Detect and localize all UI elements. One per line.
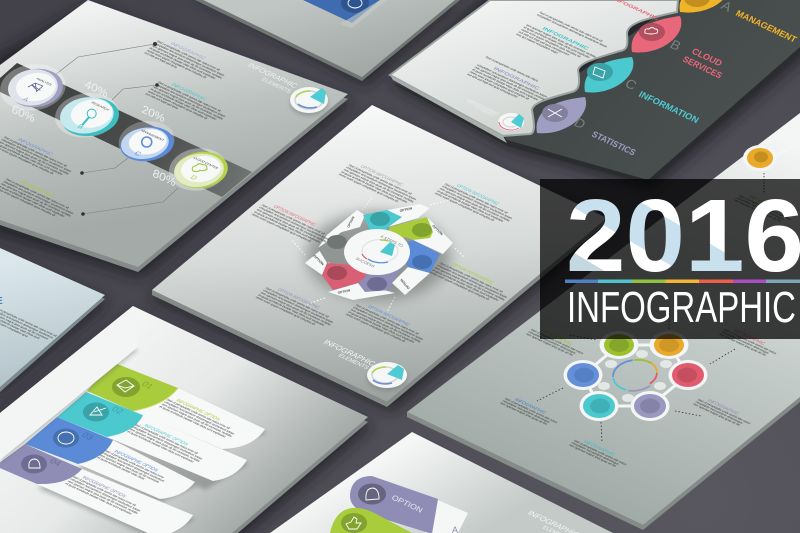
ribbon 2 text: INFOGRAPHIC OPTION	[143, 423, 190, 447]
text block red: rem aperiam eaque ipsa quae ab illo	[718, 332, 767, 357]
node red	[668, 360, 708, 390]
text block teal: nemo enim ipsam voluptatem quia voluptas sit	[434, 192, 495, 222]
sheet title: ELEMENTS	[337, 353, 370, 371]
ribbon 1 text: INFOGRAPHIC OPTION	[175, 398, 222, 422]
text block green	[429, 258, 515, 306]
text block red: OPTION INFOGRAPHIC	[272, 204, 318, 228]
text block red	[251, 200, 337, 248]
text block purple	[255, 283, 341, 331]
text block teal: INFOGRAPHIC	[170, 82, 209, 103]
hub	[344, 229, 410, 275]
text block red: INFOGRAPHIC	[732, 328, 767, 347]
cover flap shadow	[0, 345, 138, 463]
grey step letters: D	[571, 115, 588, 132]
rainbow rule	[565, 280, 800, 283]
ribbon 1 text: voluptatem accusantium doloremque laudantium totam	[163, 400, 236, 436]
text block red: et quasi architecto beatae vitae dicta sunt explicabo	[253, 210, 322, 244]
sheet title: INFOGRAPHIC	[246, 61, 300, 90]
dotted connectors	[292, 198, 465, 312]
text block green: voluptatem accusantium doloremque laudantium totam	[436, 264, 509, 299]
text block teal: eos qui ratione voluptatem sequi	[515, 33, 560, 55]
ribbon 3 blue: 03	[80, 431, 96, 442]
text block teal	[434, 179, 520, 227]
blue segment	[379, 240, 440, 273]
red segment	[322, 253, 379, 290]
sheet: circular process	[407, 113, 800, 530]
ribbon 3 text	[96, 446, 172, 487]
text block purple: Sed ut perspiciatis unde omnis iste natus	[697, 398, 752, 425]
circle labels	[35, 77, 220, 170]
centre ring	[612, 358, 658, 393]
text block green: INFOGRAPHIC	[18, 179, 57, 200]
text block purple: et quasi architecto beatae vitae dicta sunt explicabo	[148, 47, 217, 80]
pill: purple option	[350, 476, 438, 533]
text block blue: Sed ut perspiciatis unde omnis iste natus error sit	[354, 303, 420, 335]
text block green: voluptatem accusantium doloremque laudantium totam	[2, 180, 75, 215]
ribbon 2 text: et quasi architecto beatae vitae dicta sunt explicabo	[126, 430, 195, 463]
text block purple	[466, 55, 557, 108]
ribbon 2 text: rem aperiam eaque ipsa quae ab illo inventore veritatis	[129, 428, 202, 463]
text block purple: rem aperiam eaque ipsa quae ab illo inventore veritatis	[151, 44, 224, 80]
text block red: voluptatem accusantium doloremque laudantium totam	[258, 206, 331, 241]
sheet title: INFOGRAPHIC	[322, 338, 378, 368]
text block top: rem aperiam eaque ipsa quae ab illo inventore veritatis	[343, 168, 415, 203]
text block orange: Sed ut perspiciatis unde omnis iste natus	[738, 194, 793, 221]
teal segment	[363, 210, 402, 253]
text block purple: OPTION INFOGRAPHIC	[276, 287, 322, 311]
ribbon shadows	[37, 391, 267, 533]
text block blue: et quasi architecto beatae vitae dicta sunt explicabo	[347, 310, 416, 344]
node orange	[650, 331, 688, 359]
hub: SUCCESS	[354, 256, 376, 268]
ribbon 4 purple	[0, 444, 193, 533]
petal: cloud services	[632, 16, 681, 52]
text block teal: Sed ut perspiciatis unde omnis iste natus	[573, 439, 628, 466]
sheet: bottom pills	[270, 432, 613, 533]
text block teal: nemo enim ipsam voluptatem quia voluptas sit	[147, 90, 209, 120]
text block teal: et quasi architecto beatae vitae dicta sunt explicabo	[436, 189, 505, 223]
ribbon 1 text: rem aperiam eaque ipsa quae ab illo inventore veritatis	[161, 403, 234, 438]
blue option ribbon	[303, 0, 387, 28]
text block purple: nemo enim ipsam voluptatem quia voluptas sit	[146, 49, 208, 79]
circle labels: MANAGEMENT	[140, 129, 165, 142]
ribbon 1 text: Sed ut perspiciatis unde omnis iste natus error sit	[166, 398, 231, 430]
percent labels	[10, 78, 177, 189]
wing labels: OPTION	[346, 215, 356, 228]
wave labels: STATISTICS	[590, 129, 637, 157]
text block teal: nemo enim ipsam voluptatem quia voluptas sit	[520, 28, 582, 58]
text block purple: Sed ut perspiciatis unde omnis iste natus error sit	[156, 40, 221, 72]
node blue	[564, 360, 602, 390]
ribbon 4 text: rem aperiam eaque ipsa quae ab illo inventore veritatis	[67, 480, 140, 515]
title: 2016: 2016	[566, 178, 800, 293]
step B research	[52, 89, 122, 142]
ribbon 4 text: voluptatem accusantium doloremque laudantium totam	[69, 477, 142, 513]
wing labels: OPTION	[337, 288, 351, 295]
wave labels: SERVICES	[681, 54, 724, 80]
percent labels: 60%	[10, 103, 36, 125]
connector lines	[55, 42, 178, 216]
sheet: far left	[0, 248, 105, 392]
icon: pie badge	[367, 362, 407, 391]
text block blue: Sed ut perspiciatis unde omnis iste natus error sit	[3, 136, 68, 168]
text block teal	[515, 11, 611, 68]
text block purple: voluptatem accusantium doloremque laudantium totam	[476, 63, 549, 99]
text block blue: voluptatem accusantium doloremque	[501, 399, 551, 424]
text block green: rem aperiam eaque ipsa quae ab illo inventore veritatis	[0, 182, 73, 218]
text block green: OPTION INFOGRAPHIC	[450, 262, 496, 286]
ribbon 4 text: INFOGRAPHIC OPTION	[81, 475, 128, 499]
step C management	[116, 117, 177, 165]
text block red: nemo enim ipsam voluptatem quia voluptas sit	[251, 213, 312, 243]
text block teal: INFOGRAPHIC	[541, 26, 590, 52]
petal: management	[680, 0, 729, 13]
wave labels: INFORMATION	[637, 89, 701, 125]
text block teal: voluptatem accusantium doloremque	[570, 441, 620, 466]
petal: information	[585, 57, 633, 92]
step letters: A	[21, 97, 30, 103]
text block purple: nemo enim ipsam voluptatem quia voluptas sit	[255, 296, 316, 326]
fold detail	[425, 498, 468, 533]
circle labels: CLOUD CENTER	[192, 156, 220, 170]
text block purple	[692, 395, 755, 429]
node teal	[580, 391, 618, 421]
text block teal: rem aperiam eaque ipsa quae ab illo inventore veritatis	[525, 23, 598, 59]
dotted connectors	[537, 310, 735, 442]
pill: green	[330, 508, 412, 533]
wing labels: OPTION	[312, 254, 325, 267]
sheet title: ELEMENTS	[474, 105, 496, 117]
text block teal: Sed ut perspiciatis unde omnis iste natus error sit	[157, 81, 222, 113]
text block blue: INFOGRAPHIC	[16, 137, 55, 158]
text block blue: INFOGRAPHIC	[513, 397, 548, 416]
text block green: nemo enim ipsam voluptatem quia voluptas sit	[429, 271, 490, 301]
wing labels: OPTION	[431, 224, 444, 237]
text block purple: voluptatem accusantium doloremque laudantium totam	[153, 42, 226, 77]
text block teal: voluptatem accusantium doloremque laudantium totam	[154, 83, 227, 118]
icon: pie badge	[290, 87, 328, 116]
text block purple: INFOGRAPHIC	[492, 66, 541, 92]
text block teal: rem aperiam eaque ipsa quae ab illo inventore veritatis	[152, 85, 225, 121]
text block teal: et quasi architecto beatae vitae dicta sunt explicabo	[523, 26, 591, 59]
text block blue: Sed ut perspiciatis unde omnis iste natus	[504, 397, 559, 424]
ribbon 3 text: Sed ut perspiciatis unde omnis iste natus error	[104, 449, 165, 479]
percent labels: 40%	[83, 78, 109, 100]
step letters: D	[189, 175, 198, 181]
text block purple: Sed ut perspiciatis unde omnis iste natus error sit	[264, 286, 330, 318]
text block teal: rem aperiam eaque ipsa quae ab illo	[568, 443, 617, 468]
text block top: nemo enim ipsam voluptatem quia voluptas sit	[338, 173, 399, 203]
sheet: wave list	[390, 0, 800, 184]
text block green	[0, 174, 81, 222]
text block red: Sed ut perspiciatis unde omnis iste natus error sit	[260, 203, 326, 235]
text block purple: aut odit aut fugit sed quia	[143, 51, 179, 69]
ribbon 3 text: voluptatem accusantium doloremque laudantium	[101, 451, 166, 483]
text block red: voluptatem accusantium doloremque	[720, 330, 770, 355]
text block blue	[345, 300, 431, 348]
text block blue: rem aperiam eaque ipsa quae ab illo inventore veritatis	[350, 308, 422, 343]
step D cloud center	[166, 144, 231, 194]
text block blue: voluptatem accusantium doloremque laudantium totam	[0, 138, 73, 173]
ribbon 4 text	[64, 472, 148, 517]
text block green	[525, 325, 588, 359]
text block purple: et quasi architecto beatae vitae dicta sunt explicabo	[471, 68, 540, 101]
wing labels: OPTION	[399, 277, 411, 290]
purple segment	[358, 253, 403, 292]
dark band	[0, 63, 252, 197]
text block teal: Sed ut perspiciatis unde omnis iste natus error sit	[443, 182, 509, 214]
percent labels: 20%	[140, 103, 166, 125]
text block blue	[0, 132, 79, 180]
node purple	[630, 391, 670, 421]
dark panel	[500, 0, 800, 180]
ribbon 1 green	[87, 362, 265, 449]
circle labels: ANALYSIS	[35, 77, 54, 87]
text block green: voluptatem accusantium doloremque	[527, 330, 577, 355]
step letters	[21, 97, 198, 181]
text block red: rem aperiam eaque ipsa quae ab illo inventore veritatis	[256, 208, 328, 243]
text block green: INFOGRAPHIC	[539, 328, 574, 347]
icon: pie badge	[498, 113, 524, 131]
text block green: et quasi architecto beatae vitae dicta sunt explicabo	[431, 268, 500, 302]
sheet: top middle	[195, 0, 460, 81]
text block red: Sed ut perspiciatis unde omnis iste natus	[723, 328, 778, 355]
grey step letters: B	[667, 37, 684, 53]
step letters: B	[76, 124, 85, 130]
grey step letters: C	[622, 76, 639, 93]
ribbon 4 text: Sed ut perspiciatis unde omnis iste natus error sit	[72, 475, 137, 507]
sheet title: ELEMENTS	[260, 77, 292, 94]
ribbon 3 text: rem aperiam eaque ipsa quae ab illo inventore	[99, 454, 161, 484]
text block purple: Sed ut perspiciatis unde omnis iste natus	[484, 55, 540, 83]
light panel with wave edge	[390, 0, 678, 136]
ribbon 4 text: et quasi architecto beatae vitae dicta sunt explicabo	[64, 482, 133, 515]
wing labels: OPTION	[399, 206, 413, 213]
text block blue: OPTION INFOGRAPHIC	[366, 304, 412, 328]
sheet: six-step octagon	[152, 105, 607, 407]
ribbon 2 text	[126, 420, 210, 465]
text block blue: voluptatem accusantium doloremque laudantium totam	[352, 306, 425, 341]
text block teal: et quasi architecto beatae vitae dicta sunt explicabo	[149, 88, 218, 121]
wing labels	[312, 206, 444, 295]
white option wings	[305, 204, 453, 300]
step A analysis	[0, 60, 69, 115]
node green	[600, 331, 638, 359]
text block orange: voluptatem accusantium doloremque	[735, 196, 785, 221]
text block teal: aut odit aut fugit sed quia	[144, 92, 180, 110]
text block teal: OPTION INFOGRAPHIC	[455, 183, 501, 207]
text block purple: rem aperiam eaque ipsa quae ab illo inventore veritatis	[260, 291, 332, 326]
petal: statistics	[537, 97, 586, 133]
text block orange: INFOGRAPHIC	[747, 194, 782, 213]
ribbon 3 text: INFOGRAPHIC OPTION	[113, 449, 160, 473]
text block teal: Sed ut perspiciatis unde omnis iste natus error sit	[538, 11, 604, 43]
top key node	[743, 145, 800, 193]
text block purple: INFOGRAPHIC	[169, 41, 208, 62]
sheet: timeline with percentages	[0, 0, 348, 272]
text block teal: voluptatem accusantium doloremque laudantium totam	[441, 185, 514, 220]
wave labels: MANAGEMENT	[734, 8, 799, 45]
ribbon 1 text	[158, 395, 242, 440]
text block top: OPTION INFOGRAPHIC	[359, 164, 405, 188]
ribbon 1 text: et quasi architecto beatae vitae dicta sunt explicabo	[158, 405, 227, 438]
ribbon 4 purple: 04	[48, 457, 64, 468]
ribbon 2 teal: 02	[110, 405, 126, 416]
text block blue: nemo enim ipsam voluptatem quia voluptas sit	[345, 313, 406, 343]
ribbon 1 green: 01	[140, 380, 156, 391]
text block top: Sed ut perspiciatis unde omnis iste natus error sit	[347, 163, 413, 195]
pill: purple option: OPTION	[390, 493, 424, 515]
text block green: Sed ut perspiciatis unde omnis iste natus error sit	[5, 178, 70, 210]
ribbon 3 blue	[25, 417, 195, 499]
text block teal: aut odit aut fugit sed quia consequuntur	[518, 30, 571, 56]
sheet: ribbons	[0, 306, 368, 533]
text block purple: et quasi architecto beatae vitae dicta sunt explicabo	[257, 293, 326, 327]
title banner	[540, 178, 800, 339]
text block purple: nemo enim ipsam voluptatem quia voluptas sit	[469, 70, 530, 100]
text block green: Sed ut perspiciatis unde omnis iste natus error sit	[438, 261, 504, 293]
ribbon 3 text: et quasi architecto beatae vitae dicta	[96, 456, 146, 480]
ribbon 2 teal	[57, 392, 247, 481]
text block teal: rem aperiam eaque ipsa quae ab illo inventore veritatis	[439, 187, 511, 222]
hub: 6 STEPS TO	[379, 234, 405, 248]
ribbon 2 text: Sed ut perspiciatis unde omnis iste natus error sit	[134, 423, 199, 455]
text block purple: rem aperiam eaque ipsa quae ab illo inventore veritatis	[474, 66, 546, 101]
text block teal: INFOGRAPHIC	[582, 439, 617, 458]
grey segment	[318, 232, 379, 263]
wave labels: CLOUD	[690, 46, 724, 68]
text block teal: voluptatem accusantium doloremque laudantium totam	[536, 13, 609, 48]
text block orange: rem aperiam eaque ipsa quae ab illo	[733, 198, 782, 223]
text block green: rem aperiam eaque ipsa quae ab illo	[525, 332, 574, 357]
octagon wheel	[305, 204, 453, 300]
text block purple: voluptatem accusantium doloremque laudantium totam	[262, 289, 335, 324]
text block purple: aut odit aut fugit sed quia consequuntur	[466, 73, 519, 99]
circle labels: RESEARCH	[90, 101, 111, 112]
text block teal	[144, 77, 233, 127]
text block blue: rem aperiam eaque ipsa quae ab illo	[499, 401, 548, 426]
cover flap	[0, 306, 138, 460]
text block top: voluptatem accusantium doloremque laudantium totam	[345, 166, 418, 201]
ribbon 2 text: voluptatem accusantium doloremque laudantium totam	[131, 425, 204, 461]
text block top	[338, 160, 424, 208]
wave labels	[590, 8, 799, 157]
step letters: C	[133, 151, 142, 157]
text block blue	[499, 394, 562, 428]
text block purple: rem aperiam eaque ipsa quae ab illo	[692, 402, 741, 427]
text block red	[718, 325, 781, 359]
sheet title: INFOGRAPHIC	[465, 98, 501, 117]
text block purple: voluptatem accusantium doloremque	[694, 400, 744, 425]
text block purple	[143, 36, 232, 86]
text block top: et quasi architecto beatae vitae dicta sunt explicabo	[340, 170, 409, 204]
small percentage markers	[598, 350, 672, 402]
text block orange	[733, 191, 796, 225]
text block green: Sed ut perspiciatis unde omnis iste natus	[530, 328, 585, 355]
text block purple: INFOGRAPHIC	[706, 398, 741, 417]
text block teal	[568, 436, 631, 470]
green segment	[379, 217, 433, 253]
connecting ring	[583, 345, 688, 406]
text block green: rem aperiam eaque ipsa quae ab illo inventore veritatis	[434, 266, 506, 301]
percent labels: 80%	[151, 167, 177, 189]
grey step letters	[571, 0, 735, 132]
